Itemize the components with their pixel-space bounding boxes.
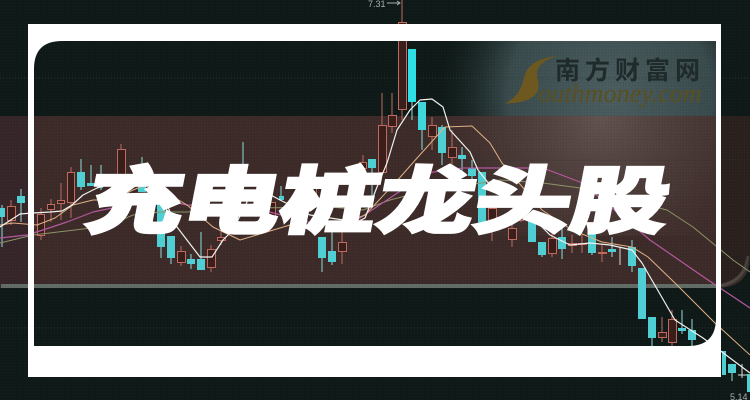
band bottom border <box>1 256 748 286</box>
high price label <box>368 0 400 9</box>
logo Chinese name: 南方财富网 <box>555 51 705 87</box>
logo latin name: outhmoney.com <box>538 79 702 108</box>
icon: S swoosh <box>505 56 558 104</box>
red candles <box>8 0 676 346</box>
doji and crosses <box>620 247 747 378</box>
title: 充电桩龙头股 <box>79 162 677 243</box>
line: white MA5 <box>0 99 750 373</box>
band darker edges <box>0 116 750 284</box>
brown price band <box>0 116 750 288</box>
moving average lines <box>0 99 750 373</box>
lighter brown glow under logo <box>420 116 716 236</box>
logo: southmoney <box>505 51 705 108</box>
line: orange MA10 <box>0 126 750 355</box>
line: magenta MA20 <box>0 168 750 308</box>
lighter teal panel behind logo <box>430 41 716 116</box>
line: olive MA30 <box>0 180 750 272</box>
faint grid lines <box>0 78 750 328</box>
